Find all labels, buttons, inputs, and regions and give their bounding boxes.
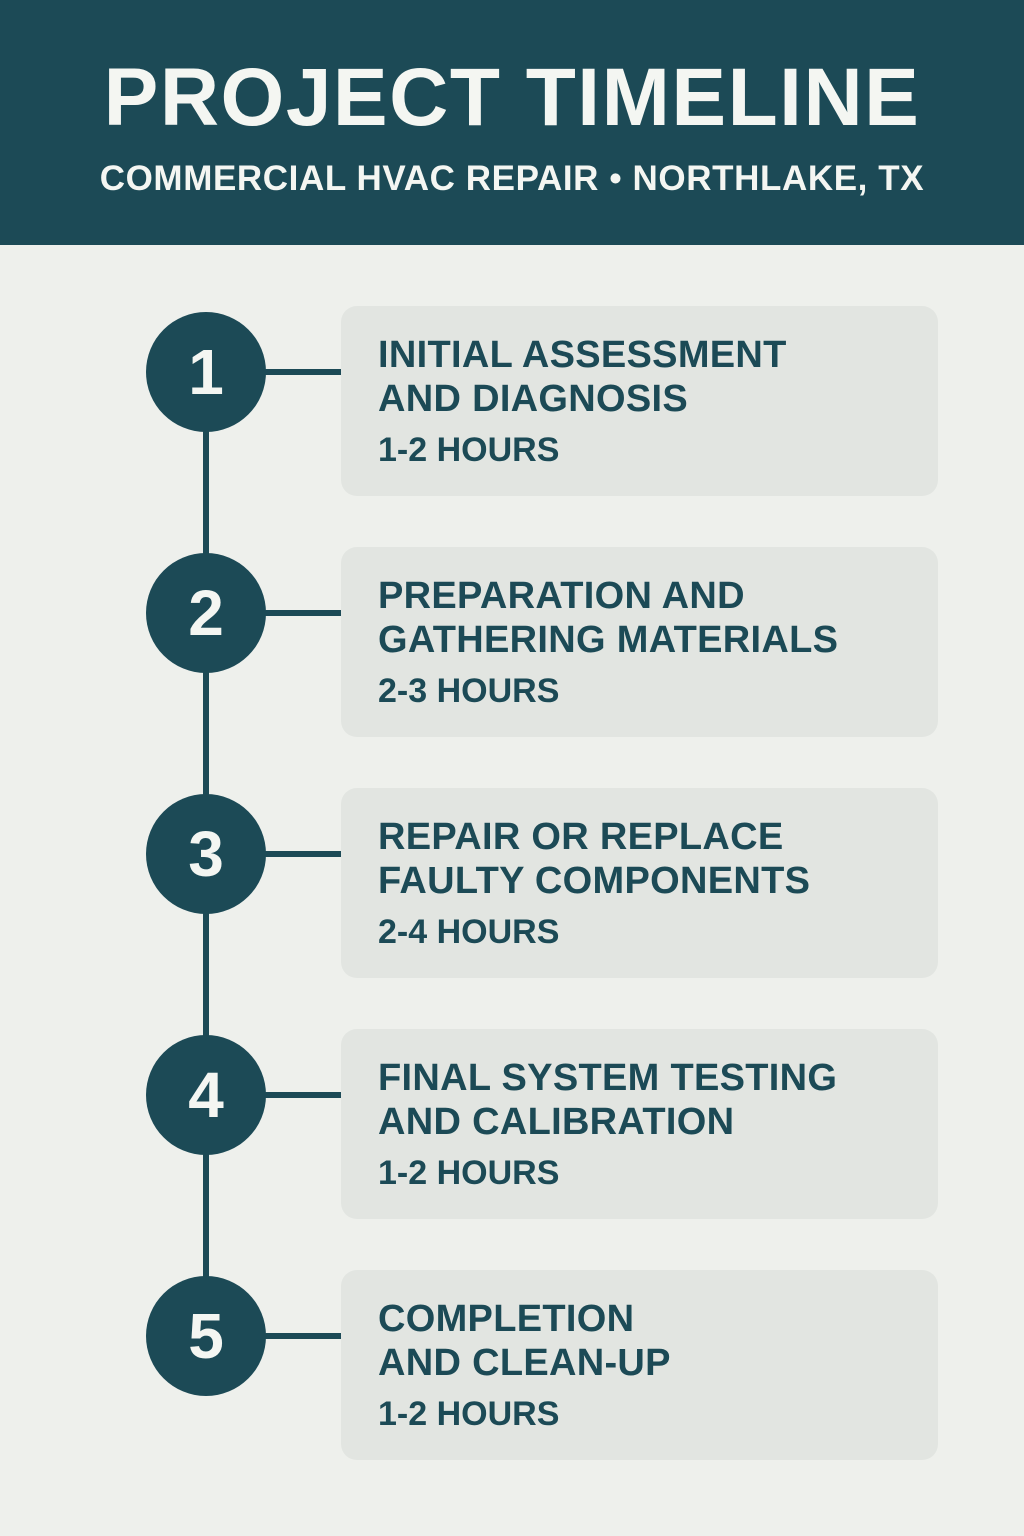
card 4: AND CALIBRATION: [378, 1101, 734, 1143]
circle 3: 3: [188, 818, 224, 890]
step 5: [146, 1270, 938, 1460]
step 4: [146, 1029, 938, 1219]
card 4: 1-2 HOURS: [378, 1154, 559, 1192]
circle 1: [146, 312, 266, 432]
card 4: [341, 1029, 938, 1219]
timeline vertical line: [203, 372, 209, 1338]
circle 5: 5: [188, 1300, 224, 1372]
card 1: 1-2 HOURS: [378, 431, 559, 469]
connector 5: [260, 1333, 342, 1339]
circle 4: 4: [188, 1059, 224, 1131]
card 5: [341, 1270, 938, 1460]
circle 1: 1: [188, 336, 224, 408]
circle 5: [146, 1276, 266, 1396]
connector 2: [260, 610, 342, 616]
connector 3: [260, 851, 342, 857]
card 1: AND DIAGNOSIS: [378, 378, 688, 420]
card 2: [341, 547, 938, 737]
step 1: [146, 306, 938, 496]
card 3: REPAIR OR REPLACE: [378, 816, 784, 858]
card 1: [341, 306, 938, 496]
subtitle: COMMERCIAL HVAC REPAIR • NORTHLAKE, TX: [100, 159, 924, 198]
step 3: [146, 788, 938, 978]
card 4: FINAL SYSTEM TESTING: [378, 1057, 837, 1099]
circle 2: 2: [188, 577, 224, 649]
card 5: AND CLEAN-UP: [378, 1342, 671, 1384]
header: [0, 0, 1024, 245]
circle 2: [146, 553, 266, 673]
card 1: INITIAL ASSESSMENT: [378, 334, 787, 376]
card 3: FAULTY COMPONENTS: [378, 860, 810, 902]
title: PROJECT TIMELINE: [104, 52, 920, 143]
circle 3: [146, 794, 266, 914]
connector 4: [260, 1092, 342, 1098]
connector 1: [260, 369, 342, 375]
card 2: PREPARATION AND: [378, 575, 745, 617]
card 3: [341, 788, 938, 978]
step 2: [146, 547, 938, 737]
card 5: 1-2 HOURS: [378, 1395, 559, 1433]
circle 4: [146, 1035, 266, 1155]
card 2: GATHERING MATERIALS: [378, 619, 838, 661]
card 5: COMPLETION: [378, 1298, 634, 1340]
card 2: 2-3 HOURS: [378, 672, 559, 710]
card 3: 2-4 HOURS: [378, 913, 559, 951]
